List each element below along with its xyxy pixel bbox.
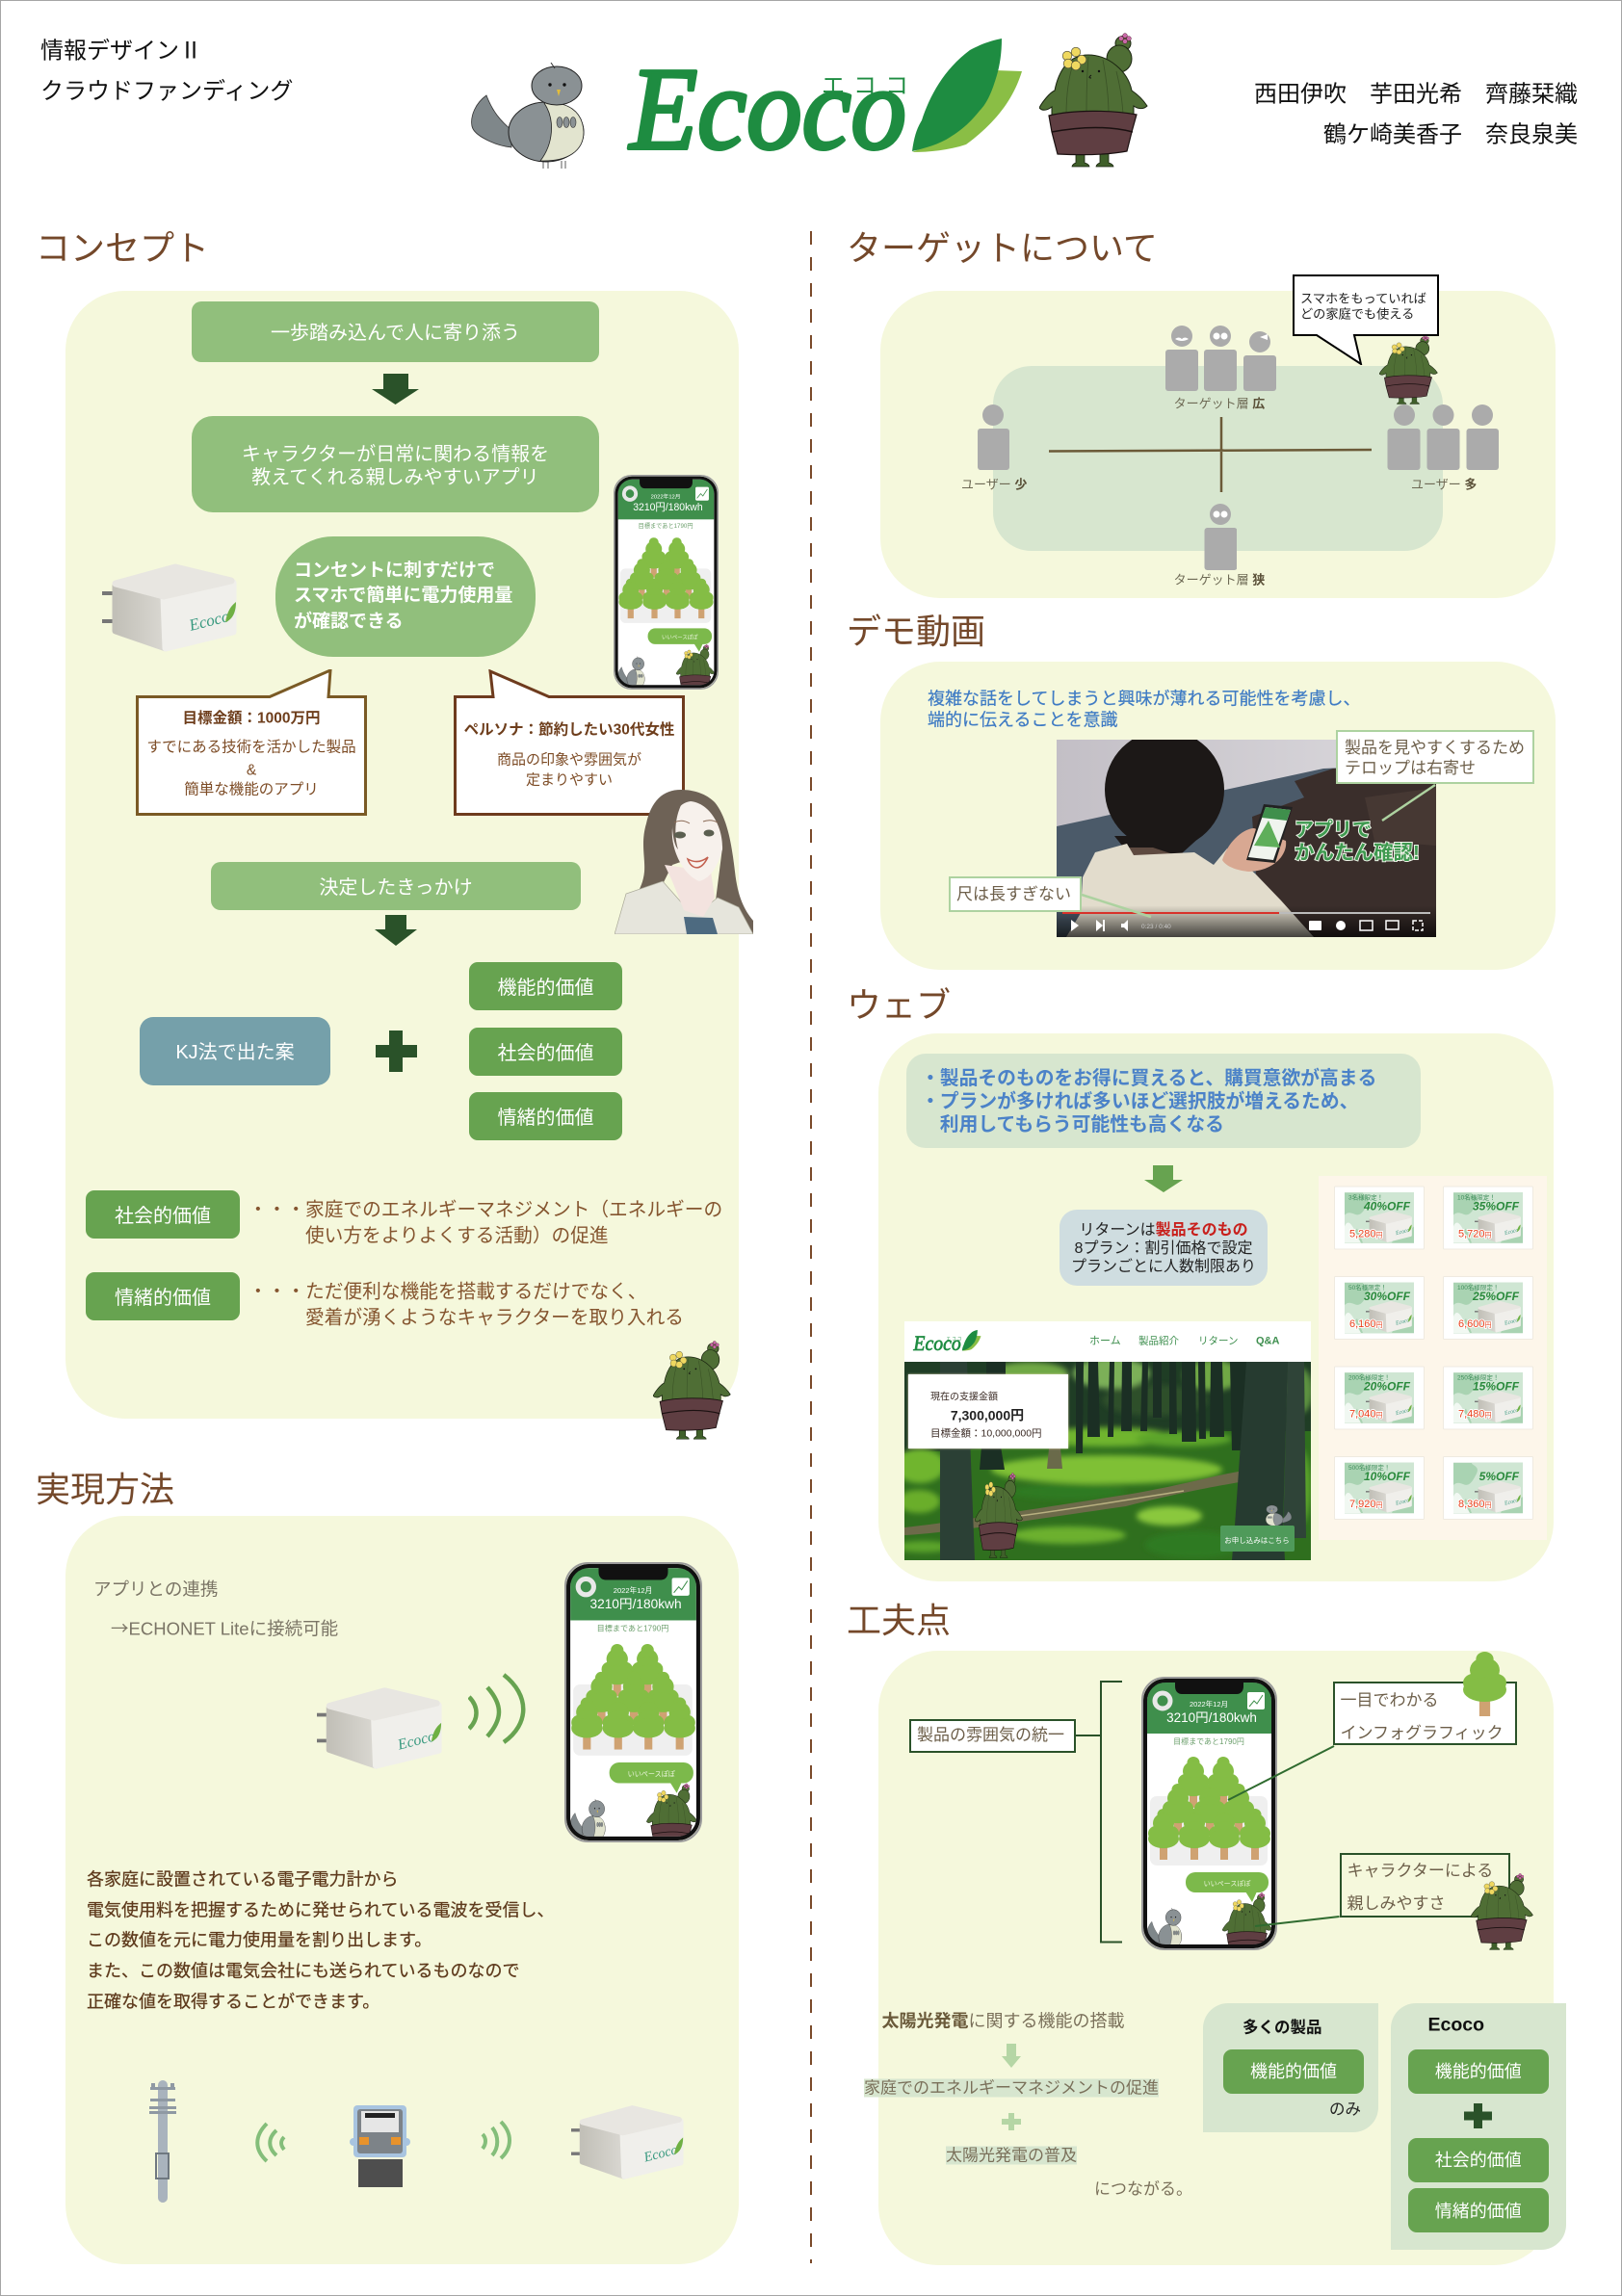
callout: persona: 定まりやすい (526, 772, 613, 788)
plan card 20%: 20%OFF (1363, 1379, 1411, 1393)
box: web insights: 利用してもらう可能性も高くなる (940, 1114, 1224, 1135)
plan card 5%: 5%OFF (1479, 1470, 1520, 1483)
center dashed divider (810, 231, 812, 2263)
label: emotional value: 情緒的価値 (115, 1287, 211, 1308)
heading: target: ターゲットについて (847, 228, 1158, 268)
product image: adapter (317, 1687, 441, 1768)
note: not too long: 尺は長すぎない (956, 885, 1071, 903)
video still: アプリで (1295, 819, 1372, 841)
icon: cactus mascot (653, 1341, 731, 1439)
paragraph: how it works: 電気使用料を把握するために発せられている電波を受信し、 (87, 1900, 554, 1919)
authors: 西田伊吹 芋田光希 齊藤栞織 (1254, 81, 1578, 108)
plan card 40%: 3名様限定！ (1348, 1192, 1383, 1202)
box: return summary: 8プラン：割引価格で設定 (1075, 1240, 1252, 1257)
description: emotional value (249, 1281, 684, 1329)
text: app integration: アプリとの連携 (93, 1579, 218, 1599)
plan card 40% (1335, 1187, 1424, 1249)
text: energy management highlight: 家庭でのエネルギーマネジメントの促進 (864, 2078, 1159, 2097)
paragraph: how it works: 各家庭に設置されている電子電力計から (87, 1870, 398, 1890)
illustration: persona woman (615, 790, 753, 934)
text: demo intent (928, 690, 1360, 729)
description: social value: ・・・家庭でのエネルギーマネジメント（エネルギーの (249, 1200, 722, 1221)
speech bubble (1293, 274, 1439, 365)
site navigation: 製品紹介 (1138, 1335, 1179, 1346)
product image: adapter (571, 2105, 684, 2179)
panel: demo video (880, 662, 1556, 970)
heading: concept: コンセプト (36, 228, 209, 268)
callout: target amount (136, 669, 367, 816)
arrow: down (1144, 1165, 1183, 1192)
return plans (1319, 1176, 1547, 1540)
plan card 30%: 30%OFF (1364, 1290, 1411, 1303)
plan card 5%: 8,360円 (1458, 1499, 1492, 1510)
icon: tree (1463, 1652, 1506, 1716)
plan card 35%: 10名様限定！ (1457, 1192, 1496, 1202)
icon: bird mascot (471, 63, 584, 169)
pill: plug in and check (275, 536, 536, 657)
note: telop right-aligned: 製品を見やすくするため (1345, 739, 1525, 757)
phone mockup (614, 475, 719, 690)
plan card 40%: 40%OFF (1363, 1200, 1411, 1213)
description: emotional value: ・・・ただ便利な機能を搭載するだけでなく、 (249, 1281, 646, 1302)
arrow: down (372, 374, 419, 404)
leader lines (1082, 784, 1436, 919)
video still (1057, 740, 1436, 937)
description: emotional value: 愛着が湧くようなキャラクターを取り入れる (305, 1308, 684, 1329)
plan card 40%: 5,280円 (1349, 1229, 1383, 1240)
paragraph: how it works: 正確な値を取得することができます。 (87, 1992, 379, 2011)
plan card 30% (1335, 1277, 1424, 1339)
plan card 15%: 15%OFF (1473, 1379, 1520, 1393)
icon: light plus (1002, 2113, 1021, 2130)
box: return summary: プランごとに人数制限あり (1071, 1259, 1256, 1275)
label: unified atmosphere: 製品の雰囲気の統一 (917, 1726, 1064, 1744)
plan card 5% (1443, 1456, 1533, 1520)
forest hero image (904, 1362, 1311, 1560)
note: telop right-aligned: テロップは右寄せ (1345, 759, 1476, 777)
callout: target amount: & (247, 763, 256, 778)
label: wide target: ターゲット層 広 (1174, 397, 1265, 410)
panel: many products (1203, 2003, 1378, 2132)
label: friendly character: 親しみやすさ (1347, 1893, 1445, 1913)
person: narrow target (1204, 504, 1237, 570)
box: step into people's lives: 一歩踏み込んで人に寄り添う (271, 323, 520, 344)
plan card 30%: 6,160円 (1349, 1318, 1383, 1330)
heading: implementation: 実現方法 (36, 1470, 174, 1509)
text: ECHONET Lite: →ECHONET Liteに接続可能 (111, 1616, 338, 1641)
label: many users: ユーザー 多 (1411, 477, 1477, 491)
description: social value: 使い方をよりよくする活動）の促進 (305, 1225, 609, 1246)
box: KJ method idea (140, 1017, 330, 1085)
box: emotional value: 情緒的価値 (497, 1108, 593, 1129)
speech bubble: どの家庭でも使える (1300, 306, 1414, 322)
map area: target matrix (993, 366, 1443, 551)
plan card 25% (1443, 1277, 1533, 1339)
project type: クラウドファンディング (40, 79, 293, 104)
label: friendly character: キャラクターによる (1347, 1861, 1493, 1880)
plan card 35% (1443, 1187, 1533, 1249)
course title: 情報デザインⅡ (40, 39, 202, 64)
person: few users (978, 404, 1009, 470)
site navigation: リターン (1198, 1335, 1238, 1346)
text: demo intent: 端的に伝えることを意識 (928, 710, 1117, 729)
label: social value: 社会的価値 (115, 1206, 211, 1227)
icon: utility pole (149, 2080, 176, 2203)
text: leads to: につながる。 (1094, 2180, 1192, 2198)
panel: target (880, 291, 1556, 598)
plan card 10% (1335, 1456, 1424, 1520)
panel: Ecoco values: 社会的価値 (1435, 2151, 1522, 2170)
paragraph: how it works: また、この数値は電気会社にも送られているものなので (87, 1962, 519, 1981)
icon: cactus mascot (1039, 33, 1148, 168)
plan card 25%: 25%OFF (1472, 1290, 1520, 1303)
icon: electric meter (350, 2105, 410, 2187)
box: web insights: ・プランが多ければ多いほど選択肢が増えるため、 (921, 1091, 1358, 1112)
panel: many products: 多くの製品 (1243, 2019, 1321, 2036)
label: social value (86, 1190, 240, 1239)
callout: persona: 商品の印象や雰囲気が (497, 751, 641, 769)
product image: adapter (102, 564, 237, 651)
website mockup (904, 1321, 1311, 1560)
box: decision trigger (211, 862, 581, 910)
person group: many users (1387, 404, 1499, 470)
label: few users: ユーザー 少 (961, 477, 1027, 491)
box: step into people's lives (192, 301, 599, 362)
pill: plug in and check: が確認できる (294, 611, 404, 632)
label: narrow target: ターゲット層 狭 (1174, 572, 1265, 587)
label: infographic (1333, 1682, 1516, 1745)
authors second line: 鶴ケ崎美香子 奈良泉美 (1323, 121, 1578, 148)
label: unified atmosphere (909, 1719, 1076, 1753)
box: decision trigger: 決定したきっかけ (319, 876, 473, 898)
panel: Ecoco values: 機能的価値 (1435, 2062, 1522, 2081)
leader lines (1223, 1741, 1344, 1929)
speech bubble: スマホをもっていれば (1300, 291, 1426, 306)
phone mockup (564, 1562, 702, 1842)
icon: plus (376, 1031, 417, 1072)
panel: implementation (65, 1516, 739, 2264)
panel: design points (878, 1651, 1554, 2265)
text: solar adoption highlight: 太陽光発電の普及 (946, 2146, 1077, 2164)
axes (1049, 417, 1372, 492)
logo: Ecoco (626, 39, 1022, 152)
plan card 25%: 100名様限定！ (1457, 1283, 1499, 1292)
site logo (911, 1329, 982, 1351)
plan card 10%: 7,920円 (1349, 1499, 1383, 1510)
box: social value: 社会的価値 (497, 1042, 593, 1063)
callout: target amount: すでにある技術を活かした製品 (146, 740, 356, 755)
apply button: お申し込みはこちら (1224, 1535, 1290, 1545)
site navigation (1089, 1335, 1282, 1346)
plan card 10%: 500名様限定！ (1348, 1463, 1390, 1472)
plan card 15%: 7,480円 (1458, 1408, 1492, 1420)
support amount card: 7,300,000円 (951, 1408, 1024, 1423)
panel: Ecoco values: 情緒的価値 (1435, 2202, 1522, 2221)
video still: かんたん確認! (1295, 842, 1420, 864)
panel: concept (65, 291, 739, 1419)
box: character app: 教えてくれる親しみやすいアプリ (251, 466, 539, 487)
callout: persona (454, 669, 685, 816)
icon: cactus mascot (1471, 1873, 1533, 1950)
icon: right waves (482, 2121, 511, 2159)
box: character app: キャラクターが日常に関わる情報を (242, 443, 549, 464)
plan card 20% (1335, 1367, 1424, 1429)
box: web insights: ・製品そのものをお得に買えると、購買意欲が高まる (921, 1067, 1376, 1088)
plan card 30%: 50名様限定！ (1348, 1283, 1387, 1292)
plan card 20%: 200名様限定！ (1348, 1373, 1390, 1381)
support amount card: 目標金額：10,000,000円 (930, 1427, 1042, 1439)
plan card 25%: 6,600円 (1458, 1318, 1492, 1330)
panel: Ecoco values: Ecoco (1427, 2015, 1484, 2036)
panel: Ecoco values (1391, 2003, 1566, 2250)
box: web insights (906, 1054, 1421, 1148)
box: functional value: 機能的価値 (497, 977, 593, 998)
note: telop right-aligned (1336, 730, 1534, 784)
phone mockup (1141, 1677, 1277, 1950)
apply button (1219, 1526, 1295, 1552)
heading: demo video: デモ動画 (847, 612, 985, 651)
box: functional value (469, 962, 622, 1010)
arrow: down (375, 915, 417, 946)
label: friendly character (1339, 1853, 1510, 1917)
box: return summary (1060, 1210, 1268, 1286)
box: character app (192, 416, 599, 512)
icon: cactus mascot (1379, 336, 1438, 404)
person group: wide target (1165, 326, 1276, 391)
paragraph: how it works (87, 1870, 554, 2011)
video still: 0:23 / 0:40 (1141, 924, 1171, 930)
plan card 10%: 10%OFF (1364, 1470, 1411, 1483)
support amount card: 現在の支援金額 (930, 1393, 998, 1402)
pill: plug in and check: スマホで簡単に電力使用量 (294, 586, 512, 606)
panel: many products: 機能的価値 (1250, 2062, 1337, 2081)
label: infographic: 一目でわかる (1341, 1691, 1439, 1709)
bracket: unified look (1073, 1680, 1124, 1944)
panel: many products: のみ (1329, 2101, 1361, 2119)
text: demo intent: 複雑な話をしてしまうと興味が薄れる可能性を考慮し、 (928, 690, 1360, 709)
callout: target amount: 簡単な機能のアプリ (184, 782, 319, 797)
icon: left waves (255, 2123, 285, 2163)
plan card 15% (1443, 1367, 1533, 1429)
plan card 35%: 35%OFF (1473, 1200, 1520, 1213)
label: infographic: インフォグラフィック (1341, 1724, 1504, 1742)
box: emotional value (469, 1092, 622, 1140)
site navigation: ホーム (1089, 1335, 1121, 1346)
plan card 15%: 250名様限定！ (1457, 1373, 1499, 1381)
icon: wireless waves (468, 1673, 526, 1744)
arrow: light down (1002, 2044, 1021, 2068)
plan card 20%: 7,040円 (1349, 1408, 1383, 1420)
paragraph: how it works: この数値を元に電力使用量を割り出します。 (87, 1931, 432, 1950)
plan card 35%: 5,720円 (1458, 1229, 1492, 1240)
text: solar function: 太陽光発電に関する機能の搭載 (882, 2011, 1125, 2030)
support amount card (908, 1374, 1068, 1448)
pill: plug in and check: コンセントに刺すだけで (294, 561, 495, 580)
panel: web (878, 1033, 1554, 1581)
callout: persona: ペルソナ：節約したい30代女性 (464, 722, 674, 738)
site navigation: Q&A (1256, 1335, 1279, 1346)
heading: web: ウェブ (847, 985, 951, 1025)
note: not too long (949, 876, 1082, 912)
box: return summary: リターンは製品そのもの (1079, 1222, 1248, 1239)
box: KJ method idea: KJ法で出た案 (175, 1042, 295, 1063)
callout: target amount: 目標金額：1000万円 (183, 711, 320, 726)
heading: design points: 工夫点 (847, 1601, 951, 1640)
label: emotional value (86, 1272, 240, 1320)
box: social value (469, 1028, 622, 1076)
description: social value (249, 1200, 722, 1246)
